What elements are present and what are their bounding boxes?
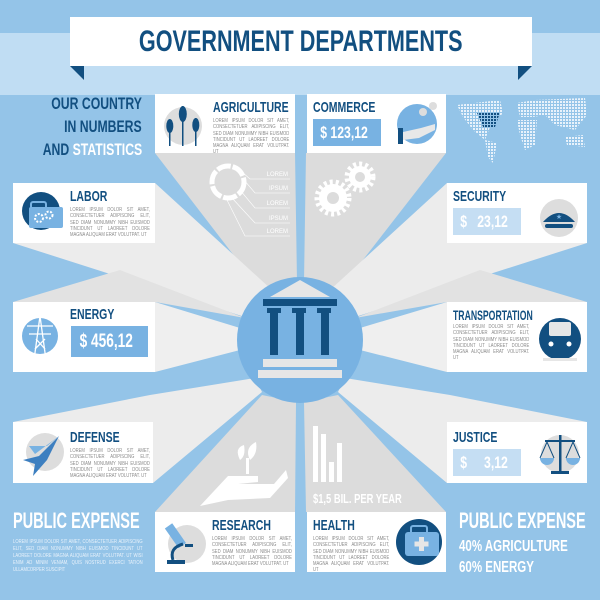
intro heading: OUR COUNTRY: [51, 94, 142, 113]
icon: train: [539, 318, 581, 361]
icon: scales: [540, 435, 580, 474]
icon: jet: [23, 433, 64, 476]
panel: justice: JUSTICE: [453, 429, 497, 446]
panel: agriculture: AGRICULTURE: [213, 99, 289, 116]
text: public expense left: [13, 508, 143, 573]
panel: security: [447, 183, 587, 243]
panel: transportation: TRANSPORTATION: [453, 307, 533, 323]
icon: hand with globe: [397, 102, 437, 144]
panel: labor: LABOR: [70, 188, 107, 205]
chart: donut with labels: [210, 164, 290, 236]
panel: labor: LOREM IPSUM DOLOR SIT AMET, CONSECTETUER ADIPISCING ELIT, SED DIAM NONUMMY NIBH EUISMOD TINCIDUNT UT LAOREET DOLORE MAGNA ALIQUAM ERAT VOLUTPAT. UT: [70, 207, 150, 238]
intro heading: IN NUMBERS: [64, 117, 142, 136]
icon: police cap: ★: [556, 213, 562, 221]
panel: health: LOREM IPSUM DOLOR SIT AMET, CONSECTETUER ADIPISCING ELIT, SED DIAM NONUMMY NIBH EUISMOD TINCIDUNT UT LAOREET DOLORE MAGNA ALIQUAM ERAT VOLUTPAT. UT: [313, 536, 389, 573]
bar chart: [313, 426, 342, 482]
chart: donut with labels: IPSUM: [269, 216, 288, 222]
panel: security: SECURITY: [453, 188, 506, 205]
central circle: government building: [237, 277, 363, 403]
icon: briefcase: [22, 192, 63, 230]
text: public expense right: 60% ENERGY: [459, 559, 534, 576]
text: public expense right: 40% AGRICULTURE: [459, 538, 568, 555]
panel: health: [307, 512, 446, 572]
panel: justice: [447, 422, 587, 483]
text: public expense right: [459, 508, 586, 576]
panel: energy: ENERGY: [70, 306, 114, 323]
chart: donut with labels: LOREM: [267, 172, 288, 178]
panel: defense: LOREM IPSUM DOLOR SIT AMET, CONSECTETUER ADIPISCING ELIT, SED DIAM NONUMMY NIBH EUISMOD TINCIDUNT UT LAOREET DOLORE MAGNA ALIQUAM ERAT VOLUTPAT. UT: [70, 448, 150, 479]
panel: commerce: COMMERCE: [313, 99, 375, 116]
panel: transportation: LOREM IPSUM DOLOR SIT AMET, CONSECTETUER ADIPISCING ELIT, SED DIAM NONUMMY NIBH EUISMOD TINCIDUNT UT LAOREET DOLORE MAGNA ALIQUAM ERAT VOLUTPAT. UT: [453, 324, 529, 361]
panel: agriculture: LOREM IPSUM DOLOR SIT AMET, CONSECTETUER ADIPISCING ELIT, SED DIAM NONUMMY NIBH EUISMOD TINCIDUNT UT LAOREET DOLORE MAGNA ALIQUAM ERAT VOLUTPAT. UT: [213, 118, 289, 155]
panel: security: $ 23,12: [460, 212, 508, 231]
text: public expense left: PUBLIC EXPENSE: [13, 508, 140, 533]
stat text: $1,5 BIL. PER YEAR: [313, 491, 402, 506]
intro heading: [42, 94, 142, 159]
icon: medical kit: [396, 519, 442, 565]
intro heading: AND STATISTICS: [42, 140, 142, 159]
text: public expense right: PUBLIC EXPENSE: [459, 508, 586, 533]
panel: defense: DEFENSE: [70, 429, 120, 446]
panel: energy: [13, 302, 155, 372]
icon: power pylon: [22, 318, 58, 354]
panel: justice: $ 3,12: [460, 453, 508, 472]
icon: wheat: [164, 106, 202, 146]
panel: research: [155, 512, 295, 572]
panel: agriculture: [155, 94, 295, 153]
panel: energy: $ 456,12: [80, 331, 133, 352]
panel: defense: [13, 422, 153, 483]
panel: labor: [13, 183, 155, 243]
panel: transportation: [447, 302, 587, 372]
panel: health: HEALTH: [313, 517, 355, 534]
chart: donut with labels: IPSUM: [269, 186, 288, 192]
panel: research: LOREM IPSUM DOLOR SIT AMET, CONSECTETUER ADIPISCING ELIT, SED DIAM NONUMMY NIBH EUISMOD TINCIDUNT UT LAOREET DOLORE MAGNA ALIQUAM ERAT VOLUTPAT. UT: [212, 536, 292, 567]
chart: donut with labels: LOREM: [267, 229, 288, 235]
icon: gears: [314, 162, 376, 216]
chart: donut with labels: LOREM: [267, 201, 288, 207]
title banner: [70, 17, 532, 80]
icon: hand with plant: [200, 442, 288, 506]
icon: police cap: [540, 199, 578, 237]
icon: microscope: [164, 523, 206, 564]
panel: commerce: [307, 94, 446, 153]
text: public expense left: LOREM IPSUM DOLOR SIT AMET, CONSECTETUER ADIPISCING ELIT, SED DIAM NONUMMY NIBH EUISMOD TINCIDUNT UT LAOREET DOLORE MAGNA ALIQUAM ERAT VOLUTPAT. UT WISI ENIM AD MINIM VENIAM, QUIS NOSTRUD EXERCI TATION ULLAMCORPER SUSCIPIT: [13, 539, 143, 573]
world map: [458, 98, 586, 163]
title banner: GOVERNMENT DEPARTMENTS: [139, 25, 463, 58]
panel: research: RESEARCH: [212, 517, 271, 534]
panel: commerce: $ 123,12: [320, 123, 368, 142]
